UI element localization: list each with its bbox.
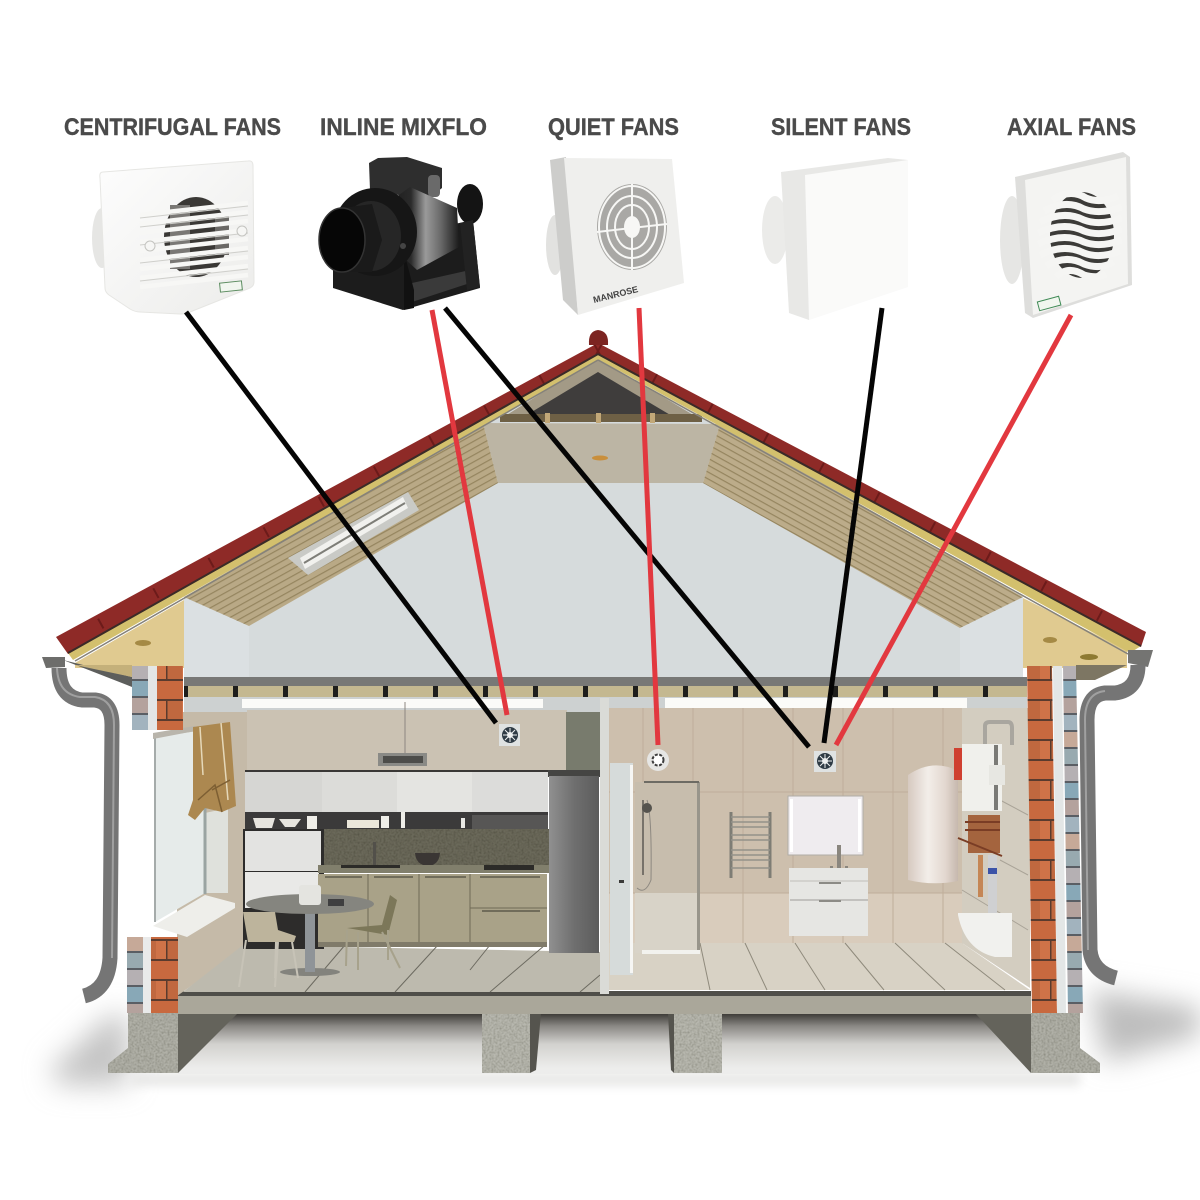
countertop xyxy=(318,865,549,873)
partition wall xyxy=(600,698,609,994)
steel fridge xyxy=(548,770,600,953)
hot water cylinder xyxy=(908,765,958,883)
line: axial fan to bathroom fan xyxy=(836,315,1071,745)
sloped ceiling right xyxy=(702,414,1023,628)
ceiling strip light xyxy=(665,698,967,708)
curtain xyxy=(188,722,236,820)
sink, bowl and hob xyxy=(373,842,440,866)
label: quiet fans: QUIET FANS xyxy=(548,114,679,141)
product: axial fan xyxy=(1000,152,1132,318)
door xyxy=(610,763,633,975)
ridge cap xyxy=(589,330,608,345)
line: silent fan to bathroom fan xyxy=(824,308,882,743)
tiled floor xyxy=(609,943,1030,990)
ground shadows xyxy=(50,990,1200,1086)
left gutter and downpipe xyxy=(42,657,114,996)
ceiling panel xyxy=(483,423,720,483)
dining table xyxy=(246,885,374,976)
stone backsplash xyxy=(324,829,549,866)
line: inline mixflo to kitchen fan xyxy=(432,310,507,715)
tiled side wall xyxy=(962,708,1030,988)
category labels xyxy=(64,114,1136,141)
roof tiles xyxy=(56,343,1146,654)
vanity unit xyxy=(789,845,868,936)
olive dining chair xyxy=(346,895,400,970)
towel radiator xyxy=(731,812,770,878)
sloped ceiling left with skylight xyxy=(184,414,500,626)
ceiling strip light xyxy=(242,699,543,708)
kitchen floor xyxy=(183,945,602,992)
label: inline mixflo: INLINE MIXFLO xyxy=(320,114,487,141)
pendant lamp xyxy=(378,702,427,766)
product: quiet fan xyxy=(546,157,684,315)
mirror xyxy=(788,796,863,855)
beige dining chair xyxy=(239,912,298,987)
kitchen room xyxy=(153,699,602,996)
fan in bathroom, square xyxy=(814,751,836,772)
tiled back wall xyxy=(609,708,963,944)
wall-hung toilet xyxy=(958,913,1012,957)
label: silent fans: SILENT FANS xyxy=(771,114,911,141)
product: inline mixflo fan xyxy=(319,157,483,310)
white lower-left cabinets xyxy=(243,829,324,949)
label: axial fans: AXIAL FANS xyxy=(1007,114,1136,141)
fan in kitchen xyxy=(499,724,520,746)
attic void xyxy=(500,358,702,423)
bathroom room xyxy=(609,698,1030,990)
open shelf with crockery xyxy=(245,812,548,830)
product: quiet fan: MANROSE xyxy=(592,284,639,305)
battens and felt xyxy=(68,354,1141,661)
right gutter and downpipe xyxy=(1085,650,1153,978)
boiler with pipes xyxy=(954,722,1012,811)
copper manifold xyxy=(958,815,1002,913)
floor slab xyxy=(177,991,1031,1014)
label: centrifugal fans: CENTRIFUGAL FANS xyxy=(64,114,281,141)
shower enclosure xyxy=(635,781,700,954)
connector lines xyxy=(186,308,1071,747)
fan in bathroom, round xyxy=(647,749,669,771)
eave soffits xyxy=(63,660,1127,687)
product: centrifugal fan xyxy=(92,161,254,314)
product: silent fan xyxy=(762,158,908,320)
plywood gable ends xyxy=(75,598,1127,668)
kitchen walls xyxy=(177,710,602,996)
line: quiet fan to round bathroom fan xyxy=(639,308,658,745)
upper cabinets xyxy=(245,770,549,812)
ceiling insulation band xyxy=(184,677,1027,713)
roof xyxy=(56,330,1146,687)
wood base cabinets xyxy=(318,874,547,947)
line: centrifugal to kitchen fan xyxy=(186,312,496,723)
line: inline mixflo to bathroom fan xyxy=(445,308,809,747)
right wall section xyxy=(1027,666,1083,1013)
window xyxy=(153,726,235,937)
gable wall xyxy=(184,360,1023,682)
left wall lower section xyxy=(127,937,178,1013)
left wall upper section xyxy=(132,666,183,730)
foundation and piers xyxy=(108,1013,1100,1073)
